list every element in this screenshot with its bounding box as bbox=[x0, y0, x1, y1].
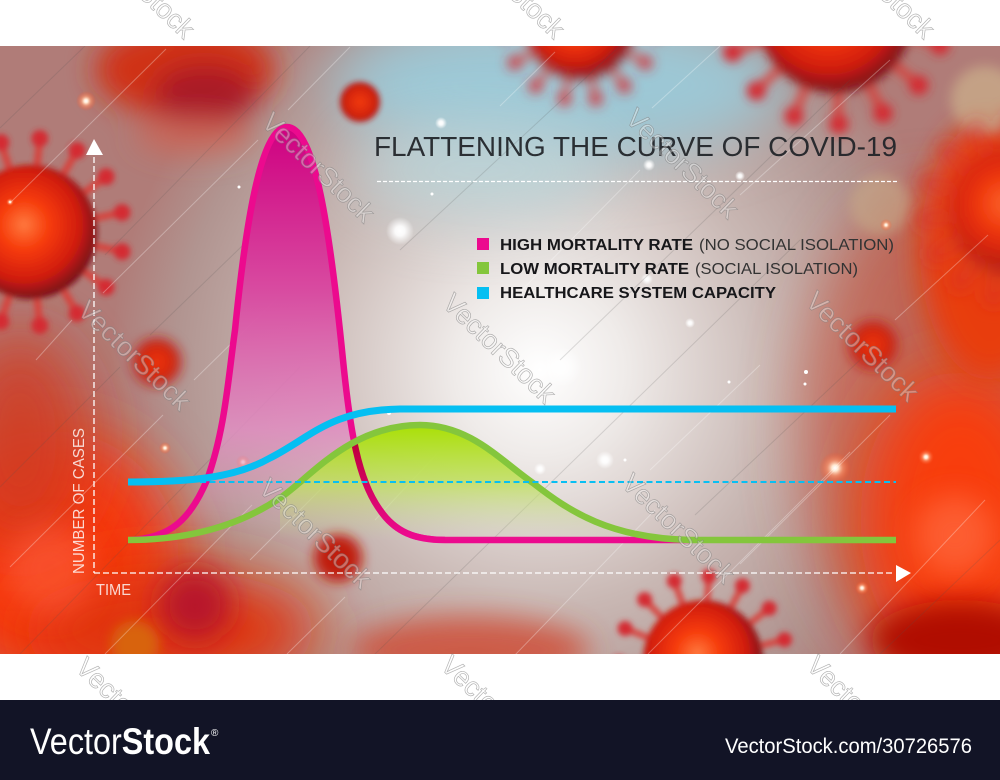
watermarks: VectorStock bbox=[253, 473, 378, 595]
virus: top right bbox=[716, 46, 956, 140]
watermarks: VectorStock bbox=[800, 286, 925, 408]
title divider bbox=[377, 180, 897, 182]
low mortality curve bbox=[128, 425, 896, 540]
high mortality curve bbox=[130, 127, 690, 540]
high mortality fill bbox=[130, 127, 445, 540]
healthcare capacity curve bbox=[128, 409, 896, 482]
footer band bbox=[0, 700, 1000, 780]
legend: capacity: HEALTHCARE SYSTEM CAPACITY bbox=[500, 285, 776, 302]
small virus balls bbox=[133, 82, 897, 582]
watermarks: VectorStock bbox=[256, 107, 381, 229]
virus: top centre bbox=[498, 46, 662, 114]
watermarks: VectorStock bbox=[72, 295, 197, 417]
capacity dashed line bbox=[200, 481, 896, 483]
footer reference: VectorStock.com/30726576 bbox=[725, 735, 972, 758]
diagonal streaks bbox=[10, 46, 988, 655]
legend: low mortality bbox=[477, 261, 858, 278]
low mortality fill bbox=[280, 425, 690, 540]
x-axis arrow bbox=[896, 565, 911, 582]
background panel bbox=[0, 46, 1000, 654]
legend: low mortality: LOW MORTALITY RATE bbox=[500, 261, 689, 278]
x-axis label: TIME bbox=[96, 582, 131, 599]
watermarks: VectorStock bbox=[801, 650, 926, 772]
sparkles bbox=[6, 91, 934, 595]
high mortality curve behind green fill bbox=[352, 444, 445, 540]
legend: high mortality: HIGH MORTALITY RATE bbox=[500, 237, 693, 254]
chart: flattening curves bbox=[71, 127, 911, 599]
y-axis label: NUMBER OF CASES bbox=[71, 428, 88, 574]
legend: high mortality: (NO SOCIAL ISOLATION) bbox=[699, 237, 894, 254]
virus: right edge bbox=[916, 114, 1000, 306]
watermarks: VectorStock bbox=[435, 650, 560, 772]
watermarks: VectorStock bbox=[437, 288, 562, 410]
legend: high mortality bbox=[477, 237, 894, 254]
registered mark: ® bbox=[211, 728, 219, 739]
y-axis arrow bbox=[86, 139, 103, 155]
legend: low mortality: (SOCIAL ISOLATION) bbox=[695, 261, 858, 278]
virus: left bbox=[0, 126, 134, 336]
virus: top left blurred bbox=[95, 22, 275, 155]
footer logo: VectorStock bbox=[30, 721, 210, 762]
watermarks: VectorStock bbox=[70, 652, 195, 774]
title: FLATTENING THE CURVE OF COVID-19 bbox=[374, 131, 897, 162]
watermarks: VectorStock bbox=[616, 468, 741, 590]
virus: bottom bbox=[612, 564, 796, 654]
axes bbox=[94, 157, 895, 573]
legend bbox=[477, 237, 894, 302]
red blurred haze bbox=[0, 66, 1000, 690]
watermarks: VectorStock bbox=[620, 103, 745, 225]
